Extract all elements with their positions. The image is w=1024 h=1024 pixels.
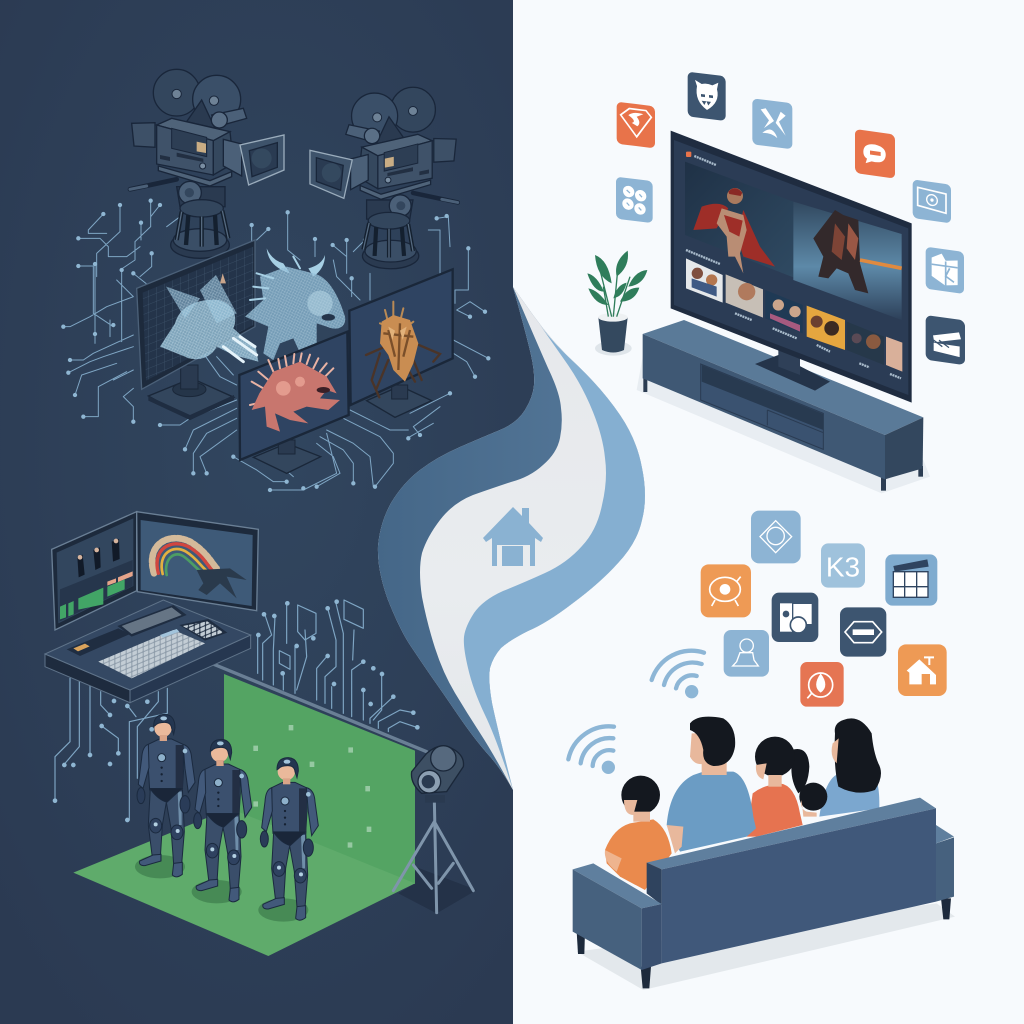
app icon: seated child xyxy=(724,630,769,677)
logo badge xyxy=(686,152,691,157)
performer in mocap suit, right xyxy=(258,758,318,922)
app icon: four petals xyxy=(616,177,653,223)
app icon: house xyxy=(898,644,947,696)
interface labels xyxy=(686,156,901,378)
app icon: beast face xyxy=(688,72,726,121)
control desk with keyboard xyxy=(45,600,251,703)
app icon: emblem xyxy=(751,511,801,563)
monitor: orange creature xyxy=(349,269,453,417)
hologram creature: winged beast xyxy=(160,273,258,362)
camera on tripod xyxy=(393,746,473,913)
TV screen with streaming interface xyxy=(671,131,912,403)
small child xyxy=(799,783,827,817)
app icon: shield xyxy=(617,102,655,148)
dark left panel background xyxy=(0,0,534,1024)
panel: TV viewing setup xyxy=(587,72,965,493)
app icon: ticket xyxy=(840,607,886,657)
hero poster left xyxy=(685,162,793,277)
app icon: K3 xyxy=(821,543,865,588)
icon: right film camera xyxy=(310,87,458,269)
app icon: K3: K3 xyxy=(826,552,860,583)
TV console with floor shadow xyxy=(637,320,930,493)
circuit traces xyxy=(55,600,417,820)
girl with ponytail xyxy=(747,737,809,837)
monitor: rainbow creature xyxy=(137,512,258,611)
app icon: drop xyxy=(800,662,844,707)
panel: motion capture studio xyxy=(45,512,477,956)
app icon: projector xyxy=(772,593,818,642)
app icon: clapperboard xyxy=(926,315,965,365)
app icon: speech bubble xyxy=(855,129,895,179)
panel: family watching on the sofa xyxy=(568,511,955,990)
mother xyxy=(819,718,881,817)
app icon: gift box xyxy=(926,247,964,294)
app icon: film slate xyxy=(885,554,937,606)
icon: wifi signal lower xyxy=(568,726,615,774)
monitor: red creature xyxy=(239,332,349,473)
performer in mocap suit, left xyxy=(135,714,195,878)
sofa xyxy=(573,798,955,990)
plant in pot xyxy=(587,251,647,356)
father xyxy=(667,717,756,853)
app icon: camera xyxy=(913,179,951,223)
central flowing wave divider xyxy=(378,287,645,790)
app icon: robot xyxy=(701,564,751,617)
icon: left film camera xyxy=(130,69,284,258)
performer in mocap suit, middle xyxy=(192,739,252,903)
icon: wifi signal upper xyxy=(652,651,704,698)
boy xyxy=(605,776,672,890)
TV stand xyxy=(755,350,830,391)
hologram creature: horned beast xyxy=(245,248,345,360)
circuit traces xyxy=(63,201,488,490)
app icon: figures xyxy=(752,98,792,149)
green screen wall and floor xyxy=(73,660,477,956)
icon: house xyxy=(483,507,543,566)
monitor: timeline editor xyxy=(52,512,137,630)
monitor: wireframe creature xyxy=(137,240,255,420)
thumbnail row xyxy=(686,258,902,372)
hero poster right xyxy=(793,202,902,320)
family seen from behind xyxy=(605,717,881,890)
panel: film production and 3D creature monitors xyxy=(63,69,488,490)
